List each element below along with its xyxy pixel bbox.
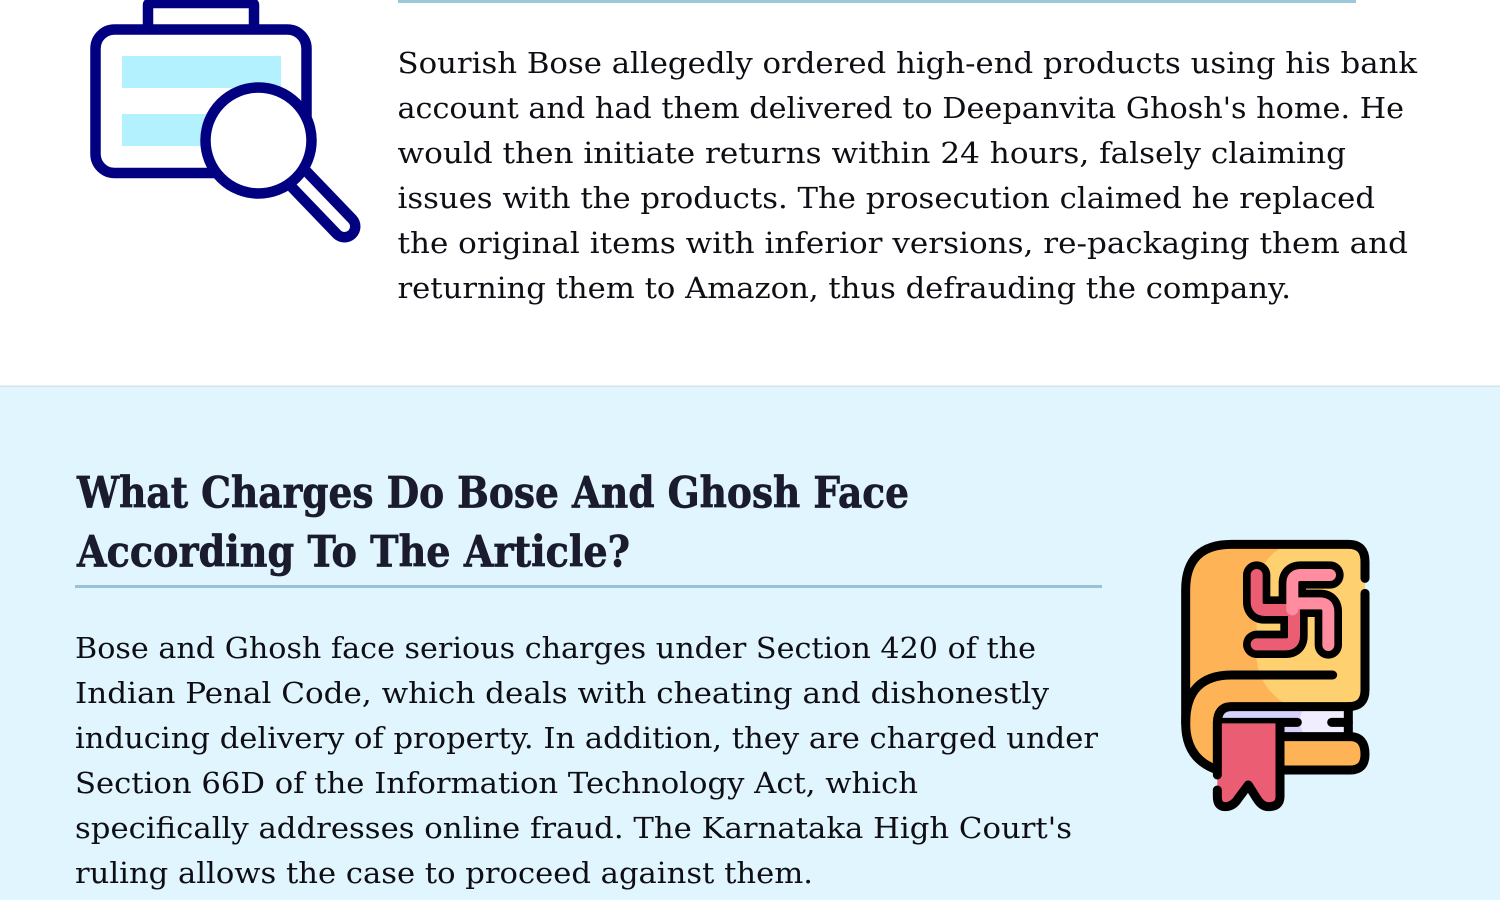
icon detail: swastika symbol (1257, 575, 1330, 645)
text block: charges description: specifically addresses online fraud. The Karnataka High Court's (75, 812, 1072, 845)
heading: what charges: According To The Article? (76, 528, 630, 578)
heading: what charges: What Charges Do Bose And Ghosh Face (76, 468, 909, 518)
text block: charges description: Indian Penal Code, which deals with cheating and dishonestly (75, 677, 1050, 710)
text block: fraud description: the original items with inferior versions, re-packaging them and (398, 227, 1408, 260)
text block: charges description: inducing delivery of property. In addition, they are charged under (75, 722, 1098, 755)
text block: fraud description: returning them to Amazon, thus defrauding the company. (398, 272, 1291, 305)
text block: fraud description: account and had them delivered to Deepanvita Ghosh's home. He (398, 92, 1404, 125)
text block: charges description: Bose and Ghosh face serious charges under Section 420 of the (75, 632, 1036, 665)
heading rule: top section (398, 0, 1356, 3)
text block: fraud description: would then initiate returns within 24 hours, falsely claiming (398, 137, 1346, 170)
text block: charges description (75, 632, 1098, 890)
panel: how the fraud worked (96, 0, 1418, 305)
text block: charges description: Section 66D of the Information Technology Act, which (75, 767, 918, 800)
icon: briefcase with magnifying glass (96, 3, 344, 226)
text block: fraud description (398, 47, 1418, 305)
text block: charges description: ruling allows the case to proceed against them. (75, 857, 813, 890)
icon: sacred book with bookmark (1186, 544, 1365, 807)
heading: what charges (76, 468, 909, 578)
text block: fraud description: issues with the products. The prosecution claimed he replaced (398, 182, 1375, 215)
text block: fraud description: Sourish Bose allegedly ordered high-end products using his bank (398, 47, 1418, 80)
panel: charges faced (0, 386, 1500, 900)
